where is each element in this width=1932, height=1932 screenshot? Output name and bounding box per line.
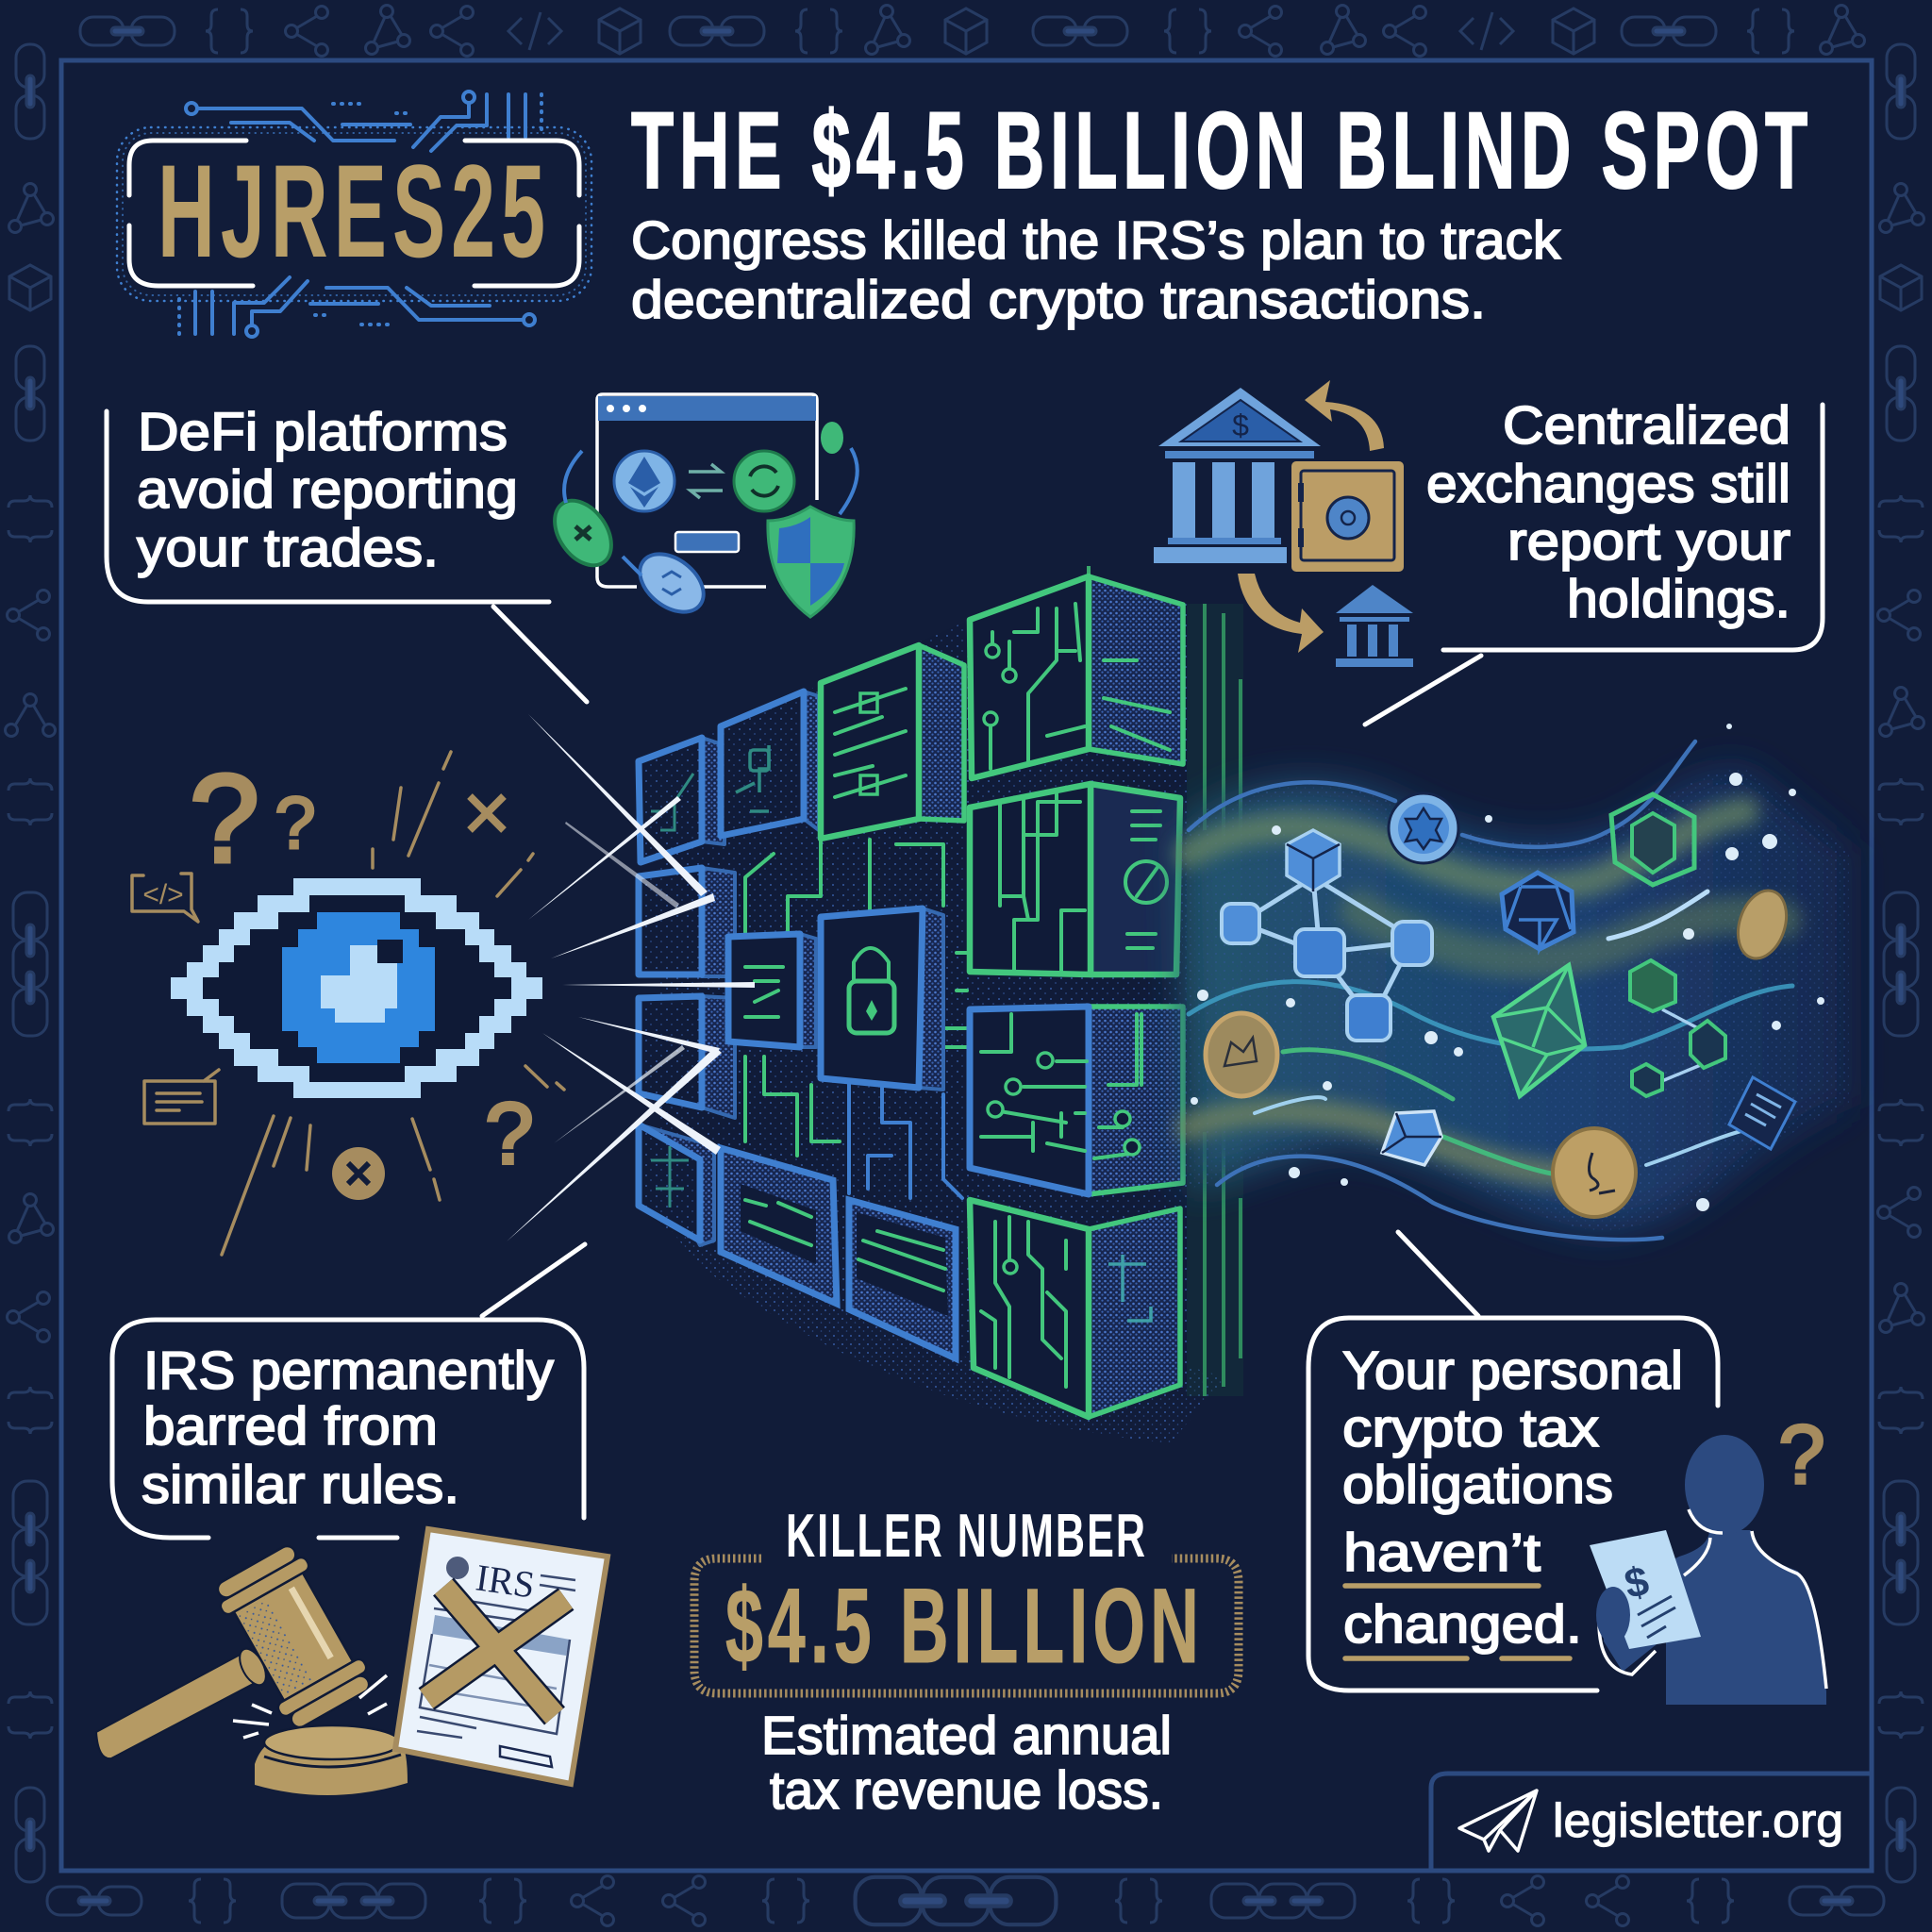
icon: green hexagon ring — [1611, 794, 1694, 885]
killer number caption — [761, 1706, 1172, 1821]
callout: DeFi platforms: DeFi platforms — [138, 402, 508, 462]
arrow down — [1238, 574, 1324, 653]
block: padlock — [821, 908, 943, 1090]
killer number caption: Estimated annual — [761, 1706, 1172, 1766]
bank: $ — [1232, 408, 1249, 442]
callout: centralized exchanges — [1365, 395, 1823, 724]
x marks — [470, 796, 504, 830]
question mark: ? — [1779, 1407, 1824, 1501]
subtitle: decentralized crypto transactions. — [631, 270, 1486, 330]
icon: DeFi window, coins and shield — [543, 394, 858, 624]
gold x — [426, 1587, 566, 1716]
icon: IRS document crossed out: IRS — [474, 1556, 538, 1607]
callout: IRS barred — [112, 1244, 585, 1538]
block: blue-green 9 — [970, 1007, 1183, 1194]
subtitle: Congress killed the IRS’s plan to track — [631, 210, 1561, 271]
icon: gavel — [96, 1541, 408, 1795]
arrow up — [1305, 380, 1384, 451]
small bank — [1336, 585, 1413, 667]
icon: paper plane — [1459, 1790, 1537, 1851]
block: blue lower 14 — [849, 1200, 956, 1358]
killer number caption: tax revenue loss. — [770, 1760, 1163, 1821]
badge circuit traces — [179, 92, 541, 337]
callout: personal tax obligations: Your personal — [1342, 1341, 1683, 1401]
killer number — [694, 1501, 1239, 1821]
icon: gold coin right — [1730, 884, 1794, 965]
message box — [144, 1070, 219, 1124]
icon: small green network — [1630, 960, 1725, 1096]
badge label: HJRES25 — [158, 137, 551, 285]
callout: personal tax obligations — [1308, 1232, 1718, 1690]
icon: pixel eye — [171, 878, 542, 1098]
flow bands — [1179, 724, 1849, 1240]
scanning rays — [507, 714, 755, 1241]
callout: DeFi platforms — [107, 402, 587, 702]
block: blue 3 — [639, 996, 735, 1118]
circled x — [332, 1147, 385, 1200]
callout: personal tax obligations: haven’t — [1343, 1523, 1541, 1583]
block: green 10 — [970, 1200, 1180, 1417]
block: green 6 — [821, 645, 964, 839]
paper — [1590, 1530, 1701, 1649]
callout: DeFi platforms: avoid reporting — [137, 459, 518, 520]
HJRES25 badge — [117, 92, 591, 337]
bank — [1154, 388, 1321, 563]
icon: bank, safe and arrows — [1154, 380, 1413, 667]
callout: personal tax obligations: changed. — [1343, 1594, 1582, 1655]
gold ticks — [222, 752, 564, 1255]
shield — [768, 507, 854, 617]
icon: floating document — [1729, 1077, 1795, 1149]
callout: IRS barred: IRS permanently — [143, 1341, 555, 1401]
question marks: ? — [275, 781, 316, 864]
crypto flow — [1179, 724, 1849, 1240]
block: blue 5 — [721, 691, 819, 836]
block: blue 2 — [639, 868, 735, 976]
wall backing — [660, 604, 1189, 1387]
subtitle — [631, 210, 1561, 330]
data wall — [639, 566, 1243, 1443]
green vertical lines — [1089, 566, 1243, 1396]
icon: ethereum diamond — [1493, 965, 1585, 1096]
icon: blue gem — [1382, 1111, 1441, 1165]
icon: blue coin — [1389, 793, 1458, 863]
website: legisletter.org — [1553, 1794, 1843, 1847]
icon: gold coin bottom — [1553, 1128, 1636, 1217]
callout: DeFi platforms: your trades. — [137, 518, 439, 578]
question marks: ? — [485, 1086, 534, 1182]
killer number value: $4.5 BILLION — [725, 1567, 1204, 1685]
eye and question marks — [132, 749, 564, 1255]
block: blue lower 13 — [721, 1148, 837, 1304]
footer: legisletter.org — [1431, 1774, 1872, 1871]
callout: centralized exchanges: report your — [1507, 511, 1790, 572]
circuit links between blocks — [745, 830, 968, 1198]
code box: </> — [142, 879, 184, 910]
safe — [1291, 461, 1404, 572]
paper: $ — [1621, 1557, 1653, 1607]
dotted gold frame — [694, 1558, 1239, 1693]
question marks: ? — [190, 749, 259, 888]
wall floor speckle — [660, 1217, 1226, 1443]
badge dotted halo — [117, 127, 591, 301]
badge corner brackets — [129, 141, 579, 286]
block: green 8 — [970, 784, 1180, 974]
callout: centralized exchanges: Centralized — [1503, 395, 1790, 456]
block: blue 4 — [639, 1124, 714, 1245]
callout: IRS barred: barred from — [143, 1396, 438, 1457]
icon: person with tax paper — [1590, 1407, 1826, 1705]
icon: gold coin left — [1206, 1013, 1277, 1096]
code box — [132, 874, 198, 922]
callout: IRS barred: similar rules. — [142, 1455, 459, 1515]
gavel head — [209, 1541, 377, 1733]
icon: blue hexagon cube — [1502, 873, 1574, 949]
block: glowing circuit — [728, 934, 816, 1047]
impact ticks — [233, 1675, 387, 1738]
icon: blockchain network — [1222, 830, 1432, 1041]
callout: centralized exchanges: exchanges still — [1426, 454, 1790, 514]
sound block — [255, 1725, 408, 1795]
block: green 7 — [970, 576, 1183, 778]
callout: personal tax obligations: obligations — [1342, 1455, 1613, 1515]
gavel handle — [96, 1653, 258, 1758]
icon: IRS document crossed out — [395, 1529, 608, 1784]
callout: personal tax obligations: crypto tax — [1342, 1398, 1599, 1458]
question marks — [190, 749, 534, 1182]
killer number heading: KILLER NUMBER — [786, 1501, 1147, 1570]
callout: centralized exchanges: holdings. — [1567, 569, 1790, 629]
block: blue 1 — [639, 738, 724, 862]
